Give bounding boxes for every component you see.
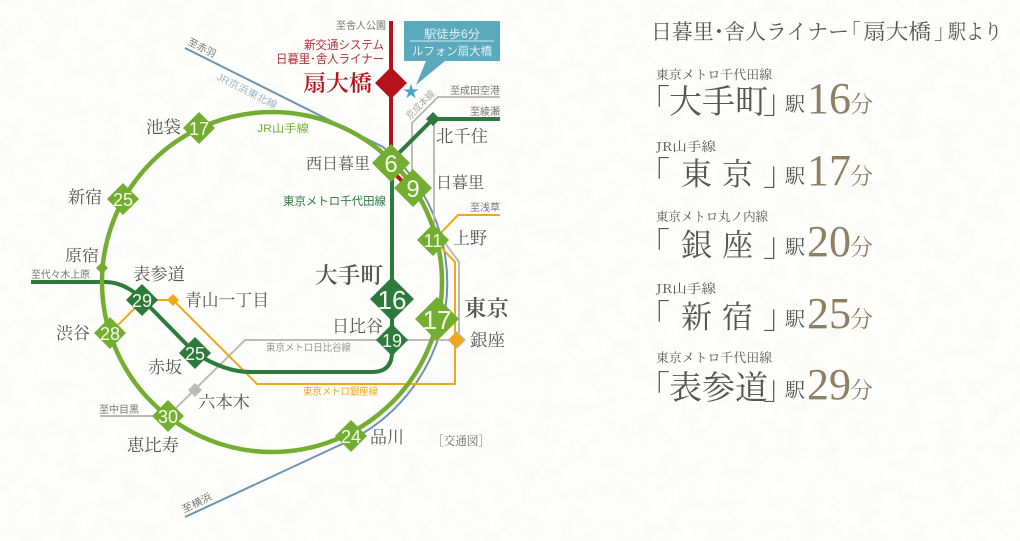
row: Omotesando 29 min: 「 [637, 362, 670, 409]
row: Omotesando 29 min [637, 348, 873, 409]
station: Ikebukuro 17: 池袋 [146, 113, 181, 138]
station: Harajuku [65, 243, 108, 274]
station: Ogi-Ohashi [303, 67, 407, 99]
station: Hibiya 19 [332, 312, 408, 356]
line label: Ginza: 東京メトロ銀座線 [303, 385, 378, 398]
row: Ginza 20 min: 銀 [681, 220, 712, 265]
direction labels: 至中目黒 [99, 403, 139, 416]
station: Omotesando 29 [126, 260, 185, 316]
station: Ikebukuro 17 [146, 112, 215, 144]
station: Ginza: 銀座 [470, 326, 505, 351]
row: Shinjuku 25 min: 新 [681, 292, 712, 337]
station: Omotesando 29: 表参道 [133, 260, 185, 285]
station: Ginza [448, 326, 505, 351]
line: Tokyo Metro Ginza [110, 215, 500, 384]
station: Nippori 9: 9 [406, 176, 420, 203]
row: Omotesando 29 min: 東京メトロ千代田線 [656, 348, 772, 366]
station: Akasaka 25: 25 [185, 344, 205, 364]
station: Ogi-Ohashi: 扇大橋 [303, 67, 372, 98]
row: Otemachi 16 min: 東京メトロ千代田線 [656, 65, 772, 83]
row: Ginza 20 min: 20 [807, 217, 851, 266]
station: Nishi-Nippori 6 [306, 144, 410, 182]
station: Harajuku: 原宿 [65, 243, 99, 266]
station: Shinjuku 25: 25 [113, 190, 133, 210]
station: Omotesando 29: 29 [132, 291, 152, 311]
line: Tokyo Metro Hibiya [100, 119, 459, 416]
line label: Yamanote: JR山手線 [257, 121, 309, 135]
map caption: ［交通図］ [432, 433, 490, 448]
station: Nippori 9: 日暮里 [436, 170, 484, 193]
station: Tokyo 17: 東京 [464, 292, 509, 323]
row: Shinjuku 25 min: 25 [807, 289, 851, 338]
row: Shinjuku 25 min: 分 [850, 301, 873, 334]
direction labels: 至舎人公園 [336, 20, 386, 32]
row: Otemachi 16 min: 16 [807, 74, 851, 123]
row: Ginza 20 min: 東京メトロ丸ノ内線 [656, 207, 768, 225]
row: Otemachi 16 min: 」 [763, 76, 796, 123]
callout: walk 6 minutes: ルフォン扇大橋 [412, 44, 492, 58]
row: Shinjuku 25 min: 」 [763, 291, 796, 338]
station: Shinjuku 25: 新宿 [68, 183, 102, 208]
station: Hibiya 19: 19 [382, 331, 402, 351]
row: Omotesando 29 min: 駅 [784, 374, 805, 403]
direction labels: 至浅草 [470, 201, 500, 214]
station: Nishi-Nippori 6: 6 [384, 151, 398, 178]
row: Shinjuku 25 min: 駅 [784, 303, 805, 332]
row: Ginza 20 min: 「 [637, 219, 670, 266]
station: Ueno 11: 11 [424, 231, 442, 251]
row: Tokyo 17 min: 京 [722, 149, 753, 194]
row: Otemachi 16 min: 「 [637, 76, 670, 123]
station: Nippori 9 [394, 169, 484, 207]
row: Shinjuku 25 min [637, 279, 873, 338]
row: Ginza 20 min: 座 [722, 220, 753, 265]
heading: 「 [840, 16, 861, 46]
direction labels: 至横浜 [180, 490, 214, 516]
station: Shinagawa 24 [335, 420, 404, 452]
station: Ikebukuro 17: 17 [189, 119, 209, 139]
station: Shinjuku 25 [68, 183, 139, 215]
line label: Chiyoda: 東京メトロ千代田線 [283, 195, 386, 208]
station: Ebisu 30 [127, 400, 184, 456]
direction labels: 至赤羽 [186, 36, 218, 60]
row: Otemachi 16 min: 駅 [784, 88, 805, 117]
station: Shibuya 28 [56, 317, 126, 349]
row: Omotesando 29 min: 29 [807, 360, 851, 409]
line: JR Yamanote [102, 112, 442, 452]
station: Otemachi 16: 16 [378, 285, 406, 315]
heading [651, 16, 1002, 46]
row: Omotesando 29 min: 」 [763, 362, 796, 409]
station: Tokyo 17: 17 [423, 305, 451, 335]
direction labels [31, 20, 500, 516]
station: Akasaka 25 [148, 337, 211, 378]
direction labels: 至綾瀬 [470, 105, 500, 118]
row: Ginza 20 min: 」 [763, 219, 796, 266]
row: Shinjuku 25 min: 宿 [722, 292, 753, 337]
station: Roppongi: 六本木 [198, 388, 250, 413]
heading: 」 [934, 16, 955, 46]
heading: 日暮里･舎人ライナー [651, 16, 849, 46]
row: Tokyo 17 min: 」 [763, 148, 796, 195]
station: Otemachi 16 [315, 259, 414, 321]
station: Ueno 11: 上野 [453, 224, 487, 249]
line: Tokyo Metro Chiyoda [31, 119, 500, 372]
row: Tokyo 17 min: 駅 [784, 160, 805, 189]
station: Nishi-Nippori 6: 西日暮里 [306, 151, 370, 174]
heading: 扇大橋 [863, 16, 931, 46]
row: Otemachi 16 min: 大手町 [669, 76, 768, 123]
callout: walk 6 minutes [404, 21, 500, 85]
row: Tokyo 17 min: 17 [807, 146, 851, 195]
station: Kita-Senju: 北千住 [436, 122, 488, 147]
row: Tokyo 17 min: 「 [637, 148, 670, 195]
row: Tokyo 17 min: 東 [681, 149, 712, 194]
line label: Nippori-Toneri Liner: 新交通システム [304, 38, 384, 52]
direction labels: 至成田空港 [450, 85, 500, 97]
station: Shibuya 28: 渋谷 [56, 319, 90, 344]
row: Ginza 20 min: 分 [850, 229, 873, 262]
line: JR Keihin-Tohoku [185, 48, 447, 517]
icon: star: ★ [403, 84, 419, 101]
heading: 駅より [947, 16, 1002, 46]
row: Shinjuku 25 min: 「 [637, 291, 670, 338]
station: Akasaka 25: 赤坂 [148, 353, 182, 378]
row: Tokyo 17 min: JR山手線 [655, 137, 717, 155]
row: Ginza 20 min: 駅 [784, 231, 805, 260]
station: Aoyama-itchome: 青山一丁目 [185, 286, 269, 311]
route map [31, 20, 509, 517]
line label: Keihin-Tohoku: JR京浜東北線 [215, 70, 279, 112]
line label: Nippori-Toneri Liner [276, 38, 384, 66]
line label: Hibiya: 東京メトロ日比谷線 [266, 341, 351, 354]
station: Ebisu 30: 恵比寿 [127, 431, 179, 456]
station: Ebisu 30: 30 [158, 407, 178, 427]
station: Hibiya 19: 日比谷 [332, 312, 383, 337]
row: Shinjuku 25 min: JR山手線 [655, 279, 717, 297]
station: Shinagawa 24: 品川 [370, 423, 404, 448]
row: Ginza 20 min [637, 207, 873, 266]
station: Otemachi 16: 大手町 [315, 259, 383, 290]
row: Omotesando 29 min: 分 [850, 372, 873, 405]
line label: Nippori-Toneri Liner: 日暮里･舎人ライナー [276, 52, 384, 66]
station: Tokyo 17 [415, 292, 509, 341]
line label: Keisei: 京成本線 [403, 87, 438, 122]
row: Otemachi 16 min [637, 65, 873, 123]
direction labels: 至代々木上原 [31, 269, 90, 281]
row: Tokyo 17 min [637, 137, 873, 195]
callout: walk 6 minutes: 駅徒歩6分 [424, 27, 481, 41]
line: Nippori-Toneri Liner [391, 21, 402, 181]
line: Keisei main line [412, 97, 500, 175]
station: Roppongi [188, 383, 250, 413]
station: Ueno 11 [417, 224, 487, 256]
row: Otemachi 16 min: 分 [850, 86, 873, 119]
station: Shibuya 28: 28 [100, 324, 120, 344]
row: Omotesando 29 min: 表参道 [669, 362, 768, 409]
station: Shinagawa 24: 24 [341, 427, 361, 447]
row: Tokyo 17 min: 分 [850, 158, 873, 191]
station: Kita-Senju [426, 112, 488, 147]
